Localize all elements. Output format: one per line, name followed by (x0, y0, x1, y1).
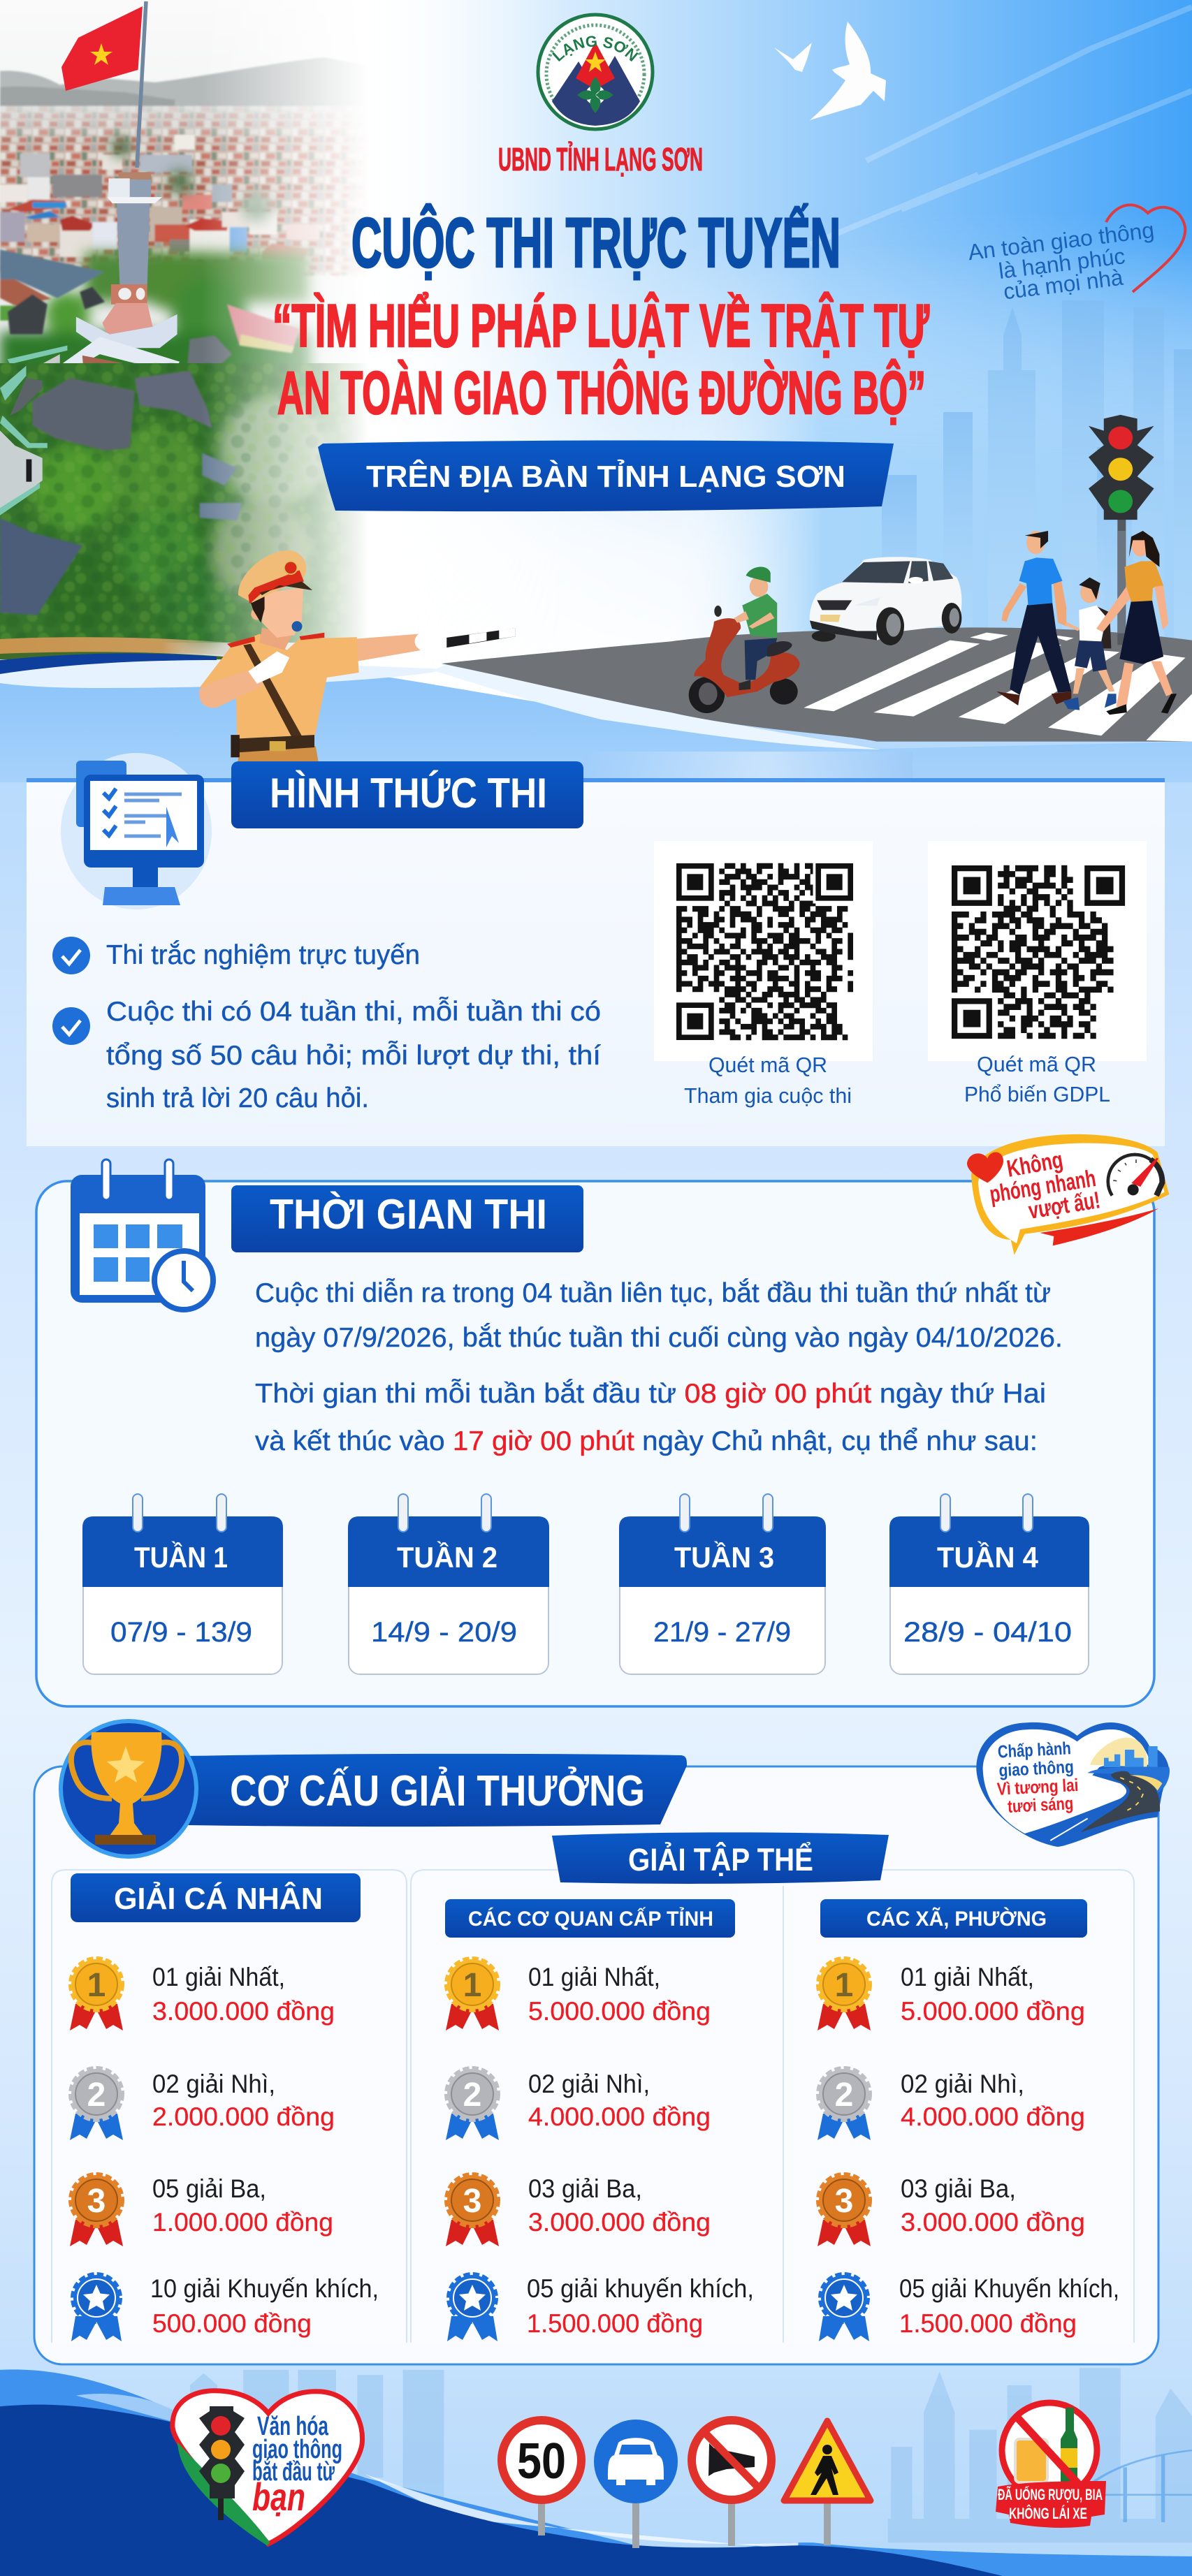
medals: column 3: 2 (835, 2077, 853, 2114)
speech bubble: chap hanh giao thong: Chấp hành (997, 1739, 1072, 1762)
medals: column 3 (817, 1959, 871, 2341)
paragraph: thoi gian: ngày 07/9/2026, bắt thúc tuần thi cuối cùng vào ngày 04/10/2026. (255, 1323, 1063, 1353)
sign: no drink driving: KHÔNG LÁI XE (1009, 2505, 1087, 2522)
road sign: pedestrian warning (784, 2421, 871, 2545)
QR captions: Quét mã QR (708, 1053, 827, 1077)
heading: giai ca nhan: GIẢI CÁ NHÂN (114, 1881, 323, 1916)
heading: thoi gian thi: THỜI GIAN THI (270, 1191, 547, 1238)
prizes: giai ca nhan: 10 giải Khuyến khích, (150, 2274, 379, 2303)
QR code: pho bien GDPL (928, 841, 1147, 1061)
prizes: cac co quan cap tinh: 01 giải Nhất, (528, 1963, 660, 1991)
medals: column 2: 3 (463, 2183, 481, 2220)
prizes: giai ca nhan: 500.000 đồng (152, 2309, 312, 2338)
illustration: car (810, 557, 961, 645)
heading: cac co quan cap tinh: CÁC CƠ QUAN CẤP TỈNH (468, 1907, 713, 1931)
logo: Lang Son emblem: LẠNG SƠN (552, 36, 639, 61)
speech bubble: chap hanh giao thong: Vì tương lai (996, 1776, 1079, 1799)
heading: cac xa phuong: CÁC XÃ, PHƯỜNG (866, 1907, 1047, 1931)
prizes: cac xa phuong: 02 giải Nhì, (901, 2070, 1024, 2098)
road with crosswalk (442, 627, 1192, 742)
road sign: no horn (692, 2420, 771, 2546)
prizes: giai ca nhan: 3.000.000 đồng (152, 1997, 335, 2026)
paragraph: thoi gian: Thời gian thi mỗi tuần bắt đầu từ 08 giờ 00 phút ngày thứ Hai (255, 1379, 1046, 1409)
prizes: cac xa phuong (899, 1963, 1119, 2338)
panel: hinh thuc thi (27, 778, 1165, 1146)
heart badge: van hoa giao thong: bắt đầu từ (252, 2456, 335, 2487)
panel: thoi gian thi (36, 1181, 1154, 1706)
subtitle banner (318, 440, 894, 511)
icon: white doves (774, 22, 886, 120)
prizes: cac co quan cap tinh: 05 giải khuyến khích, (527, 2274, 754, 2303)
heading: giai tap the (552, 1832, 889, 1884)
prizes: giai ca nhan: 01 giải Nhất, (152, 1963, 285, 1991)
road sign: speed limit 50 (502, 2420, 581, 2535)
heading: hinh thuc thi: HÌNH THỨC THI (270, 770, 547, 817)
prizes: cac xa phuong: 03 giải Ba, (901, 2174, 1016, 2203)
medals: column 1 (70, 1959, 123, 2341)
sign: no drink driving: ĐÃ UỐNG RƯỢU, BIA (998, 2485, 1103, 2503)
prizes: cac co quan cap tinh: 3.000.000 đồng (528, 2208, 711, 2237)
subtitle banner: TRÊN ĐỊA BÀN TỈNH LẠNG SƠN (366, 459, 845, 494)
logo: Lang Son emblem (537, 13, 654, 131)
prizes: cac xa phuong: 05 giải Khuyến khích, (899, 2274, 1119, 2303)
week card 3: TUẦN 3 (674, 1541, 774, 1574)
photo: Lang Son flag tower, city and green hill (0, 57, 362, 661)
heart badge: van hoa giao thong (173, 2391, 363, 2544)
heading: giai tap the: GIẢI TẬP THỂ (628, 1842, 813, 1878)
prizes: cac xa phuong: 01 giải Nhất, (901, 1963, 1034, 1991)
speech bubble: khong phong nhanh vuot au: vượt ấu! (1026, 1187, 1102, 1224)
prizes: cac xa phuong: 5.000.000 đồng (901, 1997, 1085, 2026)
speech bubble: khong phong nhanh vuot au: phóng nhanh (988, 1165, 1098, 1208)
heading: thoi gian thi (231, 1185, 583, 1252)
speech bubble: chap hanh giao thong: tươi sáng (1008, 1794, 1074, 1817)
week card 2: TUẦN 2 (397, 1541, 497, 1574)
week card 3 (619, 1494, 826, 1674)
background skyline (882, 300, 1192, 664)
medals: column 2 (446, 1959, 499, 2341)
illustration: traffic officer (199, 550, 516, 765)
bullet list: tổng số 50 câu hỏi; mỗi lượt dự thi, thí (106, 1041, 601, 1071)
week card 4 (889, 1494, 1089, 1674)
prizes: cac co quan cap tinh: 1.500.000 đồng (527, 2309, 703, 2338)
heading: hinh thuc thi (231, 761, 583, 828)
heading: co cau giai thuong: CƠ CẤU GIẢI THƯỞNG (230, 1767, 645, 1815)
QR captions: Quét mã QR (977, 1052, 1096, 1076)
slogan heart: An toan giao thong: An toàn giao thông (966, 217, 1156, 265)
paragraph: thoi gian (255, 1278, 1063, 1456)
medals: column 3: 1 (835, 1967, 853, 2004)
slogan heart: An toan giao thong: của mọi nhà (1002, 265, 1124, 304)
medals: column 3: 3 (835, 2183, 853, 2220)
speech bubble: chap hanh giao thong: giao thông (998, 1757, 1074, 1780)
QR code: tham gia cuoc thi (654, 841, 873, 1061)
prizes: cac co quan cap tinh: 4.000.000 đồng (528, 2102, 711, 2131)
week card 3: 21/9 - 27/9 (653, 1617, 791, 1648)
heart badge: van hoa giao thong: giao thông (252, 2435, 342, 2464)
week card 1 (82, 1494, 283, 1674)
prizes: cac xa phuong: 1.500.000 đồng (899, 2309, 1077, 2338)
sign: no drink driving (996, 2403, 1106, 2528)
prizes: cac co quan cap tinh: 5.000.000 đồng (528, 1997, 711, 2026)
prizes: cac co quan cap tinh: 02 giải Nhì, (528, 2070, 650, 2098)
prizes: giai ca nhan (150, 1963, 379, 2338)
icon: trophy (61, 1721, 196, 1857)
medals: column 1: 1 (87, 1967, 106, 2004)
week card 2: 14/9 - 20/9 (371, 1617, 517, 1648)
medals: column 2: 1 (463, 1967, 481, 2004)
week card 2 (348, 1494, 549, 1674)
heading: cac co quan cap tinh (445, 1899, 735, 1938)
road sign: speed limit 50: 50 (517, 2434, 566, 2489)
paragraph: thoi gian: Cuộc thi diễn ra trong 04 tuần liên tục, bắt đầu thi tuần thứ nhất từ (255, 1278, 1051, 1308)
sweeping wave under photo (0, 637, 1192, 782)
flag and pole (61, 1, 146, 168)
bullet list: sinh trả lời 20 câu hỏi. (106, 1083, 369, 1113)
heading: giai ca nhan (71, 1873, 361, 1922)
QR captions (684, 1052, 1110, 1108)
organiser name: UBND TỈNH LẠNG SƠN (498, 141, 703, 177)
prizes: giai ca nhan: 02 giải Nhì, (152, 2070, 275, 2098)
heading: cac xa phuong (820, 1899, 1087, 1938)
slogan heart: An toan giao thong (966, 205, 1185, 304)
prizes: cac xa phuong: 4.000.000 đồng (901, 2102, 1085, 2131)
week card 1: TUẦN 1 (134, 1541, 228, 1574)
speech bubble: khong phong nhanh vuot au: Không (1005, 1146, 1065, 1183)
prizes: giai ca nhan: 05 giải Ba, (152, 2174, 266, 2203)
icon: computer test (61, 753, 212, 909)
title line 1: CUỘC THI TRỰC TUYẾN (351, 204, 841, 282)
footer skyline and waves (0, 2368, 1192, 2576)
paragraph: thoi gian: và kết thúc vào 17 giờ 00 phút ngày Chủ nhật, cụ thể như sau: (255, 1426, 1038, 1456)
heading: co cau giai thuong (187, 1754, 687, 1827)
illustration: scooter rider (689, 567, 800, 713)
illustration: walking family (996, 531, 1177, 715)
sub-panel: giai ca nhan (52, 1870, 407, 2343)
medals: column 2: 2 (463, 2077, 481, 2114)
bullet list: Cuộc thi có 04 tuần thi, mỗi tuần thi có (106, 997, 601, 1027)
week card 4: TUẦN 4 (937, 1541, 1039, 1574)
sub-panel: giai tap the (411, 1870, 1134, 2343)
medals: column 1: 3 (87, 2183, 106, 2220)
icon: calendar with clock (71, 1159, 213, 1310)
heart badge: van hoa giao thong: bạn (252, 2475, 305, 2519)
prizes: cac xa phuong: 3.000.000 đồng (901, 2208, 1085, 2237)
QR captions: Phổ biến GDPL (964, 1082, 1110, 1106)
week card 4: 28/9 - 04/10 (903, 1617, 1072, 1648)
panel: co cau giai thuong (34, 1766, 1158, 2364)
illustration: traffic light (1089, 415, 1154, 645)
bullet list: Thi trắc nghiệm trực tuyến (106, 940, 420, 970)
medals: column 1: 2 (87, 2077, 106, 2114)
prizes: giai ca nhan: 2.000.000 đồng (152, 2102, 335, 2131)
slogan heart: An toan giao thong: là hạnh phúc (997, 243, 1126, 284)
QR captions: Tham gia cuộc thi (684, 1083, 852, 1108)
prizes: cac co quan cap tinh (527, 1963, 754, 2338)
bullet list (52, 937, 601, 1113)
header background (215, 0, 1192, 702)
road sign: car (594, 2420, 678, 2548)
week card 1: 07/9 - 13/9 (110, 1617, 252, 1648)
heart badge: van hoa giao thong: Văn hóa (257, 2412, 329, 2441)
speech bubble: chap hanh giao thong (976, 1722, 1170, 1847)
prizes: giai ca nhan: 1.000.000 đồng (152, 2208, 333, 2237)
speech bubble: khong phong nhanh vuot au (967, 1134, 1169, 1255)
prizes: cac co quan cap tinh: 03 giải Ba, (528, 2174, 642, 2203)
